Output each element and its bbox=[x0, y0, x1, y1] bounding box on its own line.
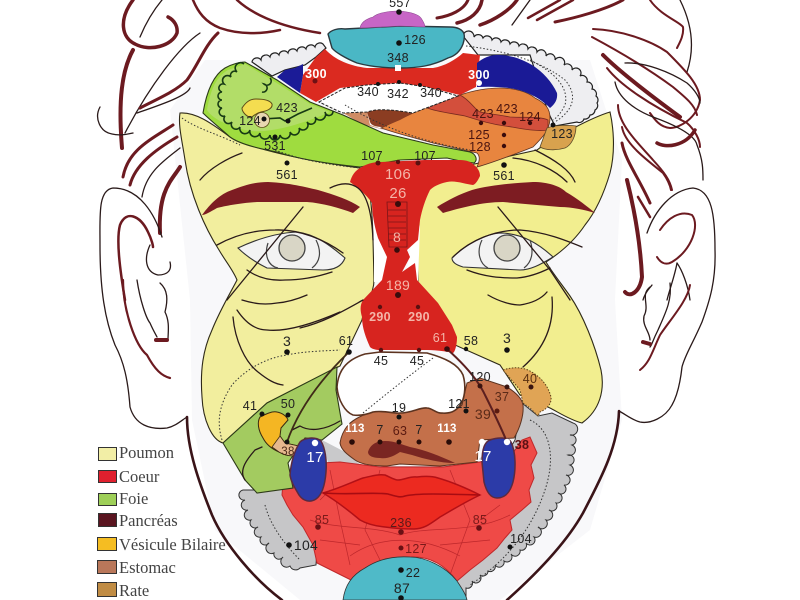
ear: left bbox=[100, 188, 187, 428]
point 561 right bbox=[493, 162, 515, 183]
point 300 left: 300 bbox=[305, 67, 327, 81]
point 531: 531 bbox=[264, 139, 286, 153]
point 123: 123 bbox=[551, 127, 573, 141]
point 38 left bbox=[281, 440, 295, 458]
region: red coeur upper bbox=[300, 49, 480, 102]
point 50: 50 bbox=[281, 397, 295, 411]
point 126: 126 bbox=[404, 33, 426, 47]
eye: right bbox=[452, 230, 582, 278]
point 38 right: 38 bbox=[515, 438, 529, 452]
point 85 left: 85 bbox=[315, 513, 329, 527]
point 124 left: 124 bbox=[239, 114, 261, 128]
point 561 left bbox=[276, 160, 298, 182]
point 127: 127 bbox=[405, 542, 427, 556]
grey strip above the mouth bbox=[322, 440, 490, 470]
point 22: 22 bbox=[406, 566, 420, 580]
point 128 bbox=[469, 140, 506, 154]
legend: Pancreas: Pancréas bbox=[119, 511, 178, 530]
point 38 right bbox=[504, 438, 529, 452]
point 39 bbox=[475, 406, 500, 422]
point 3 right: 3 bbox=[503, 330, 511, 346]
point 7 right: 7 bbox=[415, 423, 423, 437]
point 38 left: 38 bbox=[281, 446, 295, 458]
point 8 bbox=[393, 229, 401, 253]
point 340 right: 340 bbox=[420, 86, 442, 100]
region: orange rate upper bbox=[381, 88, 550, 167]
point 17 right bbox=[474, 439, 492, 465]
point 63: 63 bbox=[393, 424, 407, 438]
point 8: 8 bbox=[393, 229, 401, 245]
ear: right bbox=[619, 188, 715, 422]
point 40: 40 bbox=[523, 372, 537, 386]
point 124 right: 124 bbox=[519, 110, 541, 124]
point 113 left: 113 bbox=[345, 423, 365, 435]
point 87: 87 bbox=[394, 580, 410, 596]
white middle band edge bbox=[319, 83, 458, 113]
legend: Rate: Rate bbox=[119, 581, 149, 600]
vesicule biliaire lower bbox=[258, 412, 303, 456]
legend: Foie: Foie bbox=[119, 489, 148, 508]
point 121: 121 bbox=[448, 397, 470, 411]
point 561 right: 561 bbox=[493, 169, 515, 183]
point 120: 120 bbox=[469, 370, 491, 384]
point 423 right a: 423 bbox=[472, 107, 494, 121]
region: poumon left bbox=[179, 113, 374, 443]
point 50 bbox=[281, 397, 295, 418]
point 300 right: 300 bbox=[468, 68, 490, 82]
legend: Coeur bbox=[98, 467, 160, 486]
point 557 bbox=[389, 0, 411, 15]
point 113 left bbox=[345, 423, 365, 445]
point 423 left: 423 bbox=[276, 101, 298, 115]
point 104 left: 104 bbox=[294, 537, 318, 553]
point 3 left: 3 bbox=[283, 333, 291, 349]
point 342: 342 bbox=[387, 87, 409, 101]
point 41: 41 bbox=[243, 399, 257, 413]
point 423 right b: 423 bbox=[496, 102, 518, 116]
point 104 right: 104 bbox=[510, 532, 532, 546]
region: estomac bbox=[340, 378, 523, 466]
point 85 right: 85 bbox=[473, 513, 487, 527]
region: foie lower left bbox=[223, 367, 342, 493]
point 37: 37 bbox=[495, 390, 509, 404]
region: blue cheek right bbox=[482, 438, 515, 498]
point 58: 58 bbox=[464, 334, 478, 348]
navy region left bbox=[277, 64, 303, 93]
white band upper right bbox=[463, 31, 598, 126]
region: lower red coeur bbox=[282, 437, 537, 581]
point 7 left bbox=[376, 423, 384, 444]
point 423 left bbox=[276, 101, 298, 124]
point 63 bbox=[393, 424, 407, 444]
gold region 123 bbox=[540, 125, 576, 150]
point 107 left: 107 bbox=[361, 149, 383, 163]
point 61 left: 61 bbox=[339, 334, 353, 348]
point 236: 236 bbox=[390, 516, 412, 530]
point 26: 26 bbox=[389, 185, 407, 202]
face and cheek lines bbox=[182, 105, 575, 585]
legend: Estomac: Estomac bbox=[119, 558, 176, 577]
legend: Poumon: Poumon bbox=[119, 443, 174, 462]
point 561 left: 561 bbox=[276, 168, 298, 182]
point 17 right: 17 bbox=[474, 448, 492, 465]
region: red-orange band bbox=[427, 95, 548, 131]
region: liver green bbox=[203, 62, 476, 167]
point 107 right: 107 bbox=[414, 149, 436, 163]
point 45 left: 45 bbox=[374, 354, 388, 368]
point 61 right bbox=[433, 331, 450, 352]
point 45 left bbox=[374, 348, 388, 368]
region: grey jowl left bbox=[239, 483, 320, 570]
point 19: 19 bbox=[392, 401, 406, 415]
point 7 left: 7 bbox=[376, 423, 384, 437]
point 290 left: 290 bbox=[369, 310, 391, 324]
point 39: 39 bbox=[475, 406, 491, 422]
jaw outline: left bbox=[187, 417, 282, 600]
white band upper left bbox=[252, 43, 326, 76]
eyebrow: right bbox=[437, 182, 595, 213]
region: light brown wedge bbox=[343, 112, 385, 130]
point 348: 348 bbox=[387, 51, 409, 65]
point 7 right bbox=[415, 423, 423, 444]
legend: Coeur: Coeur bbox=[119, 467, 160, 486]
point 22 bbox=[398, 566, 420, 580]
region: lips bbox=[323, 475, 480, 529]
face shading bbox=[170, 60, 622, 600]
region: purple top bbox=[360, 11, 425, 28]
arrow lines from points 61 bbox=[287, 349, 507, 442]
eyebrow: left bbox=[202, 182, 360, 215]
legend bbox=[98, 443, 226, 600]
point 113 right bbox=[437, 423, 457, 445]
point 128: 128 bbox=[469, 140, 491, 154]
legend: Rate bbox=[98, 581, 149, 600]
point 290 right: 290 bbox=[408, 310, 430, 324]
region: rate right bbox=[503, 368, 551, 416]
region: teal forehead bbox=[328, 26, 464, 68]
point 342 bbox=[387, 80, 409, 101]
point 45 right bbox=[410, 348, 424, 368]
point 17 left bbox=[306, 440, 324, 466]
legend: Vesicule Bilaire: Vésicule Bilaire bbox=[119, 535, 226, 554]
hair: right side bbox=[437, 0, 703, 294]
region: pancreas lower bbox=[368, 441, 455, 463]
point 45 right: 45 bbox=[410, 354, 424, 368]
point 125: 125 bbox=[468, 128, 490, 142]
region: white nose hole bbox=[337, 352, 465, 415]
legend: Foie bbox=[98, 489, 148, 508]
region: poumon right bbox=[418, 112, 613, 423]
point 61 right: 61 bbox=[433, 331, 447, 345]
point 106: 106 bbox=[385, 166, 411, 183]
point 189: 189 bbox=[386, 277, 410, 293]
region: teal chin bbox=[343, 557, 467, 600]
point 423 right b bbox=[496, 102, 518, 125]
point 125 bbox=[468, 128, 506, 142]
jaw outline: right bbox=[507, 411, 619, 600]
liver wavy outline bbox=[218, 63, 333, 140]
vesicule biliaire upper bbox=[242, 99, 272, 128]
region: grey jowl right bbox=[440, 403, 578, 600]
region: pancreas upper bbox=[367, 110, 413, 127]
region: nose and glabella red bbox=[350, 160, 480, 353]
hair: left side bbox=[98, 0, 320, 233]
point 17 left: 17 bbox=[306, 449, 324, 466]
eye: left bbox=[217, 230, 345, 280]
region: blue cheek left bbox=[290, 438, 326, 501]
point 113 right: 113 bbox=[437, 423, 457, 435]
point 340 left: 340 bbox=[357, 85, 379, 99]
navy region right bbox=[477, 55, 557, 108]
point 61 left bbox=[339, 334, 353, 355]
point 41 bbox=[243, 399, 264, 416]
